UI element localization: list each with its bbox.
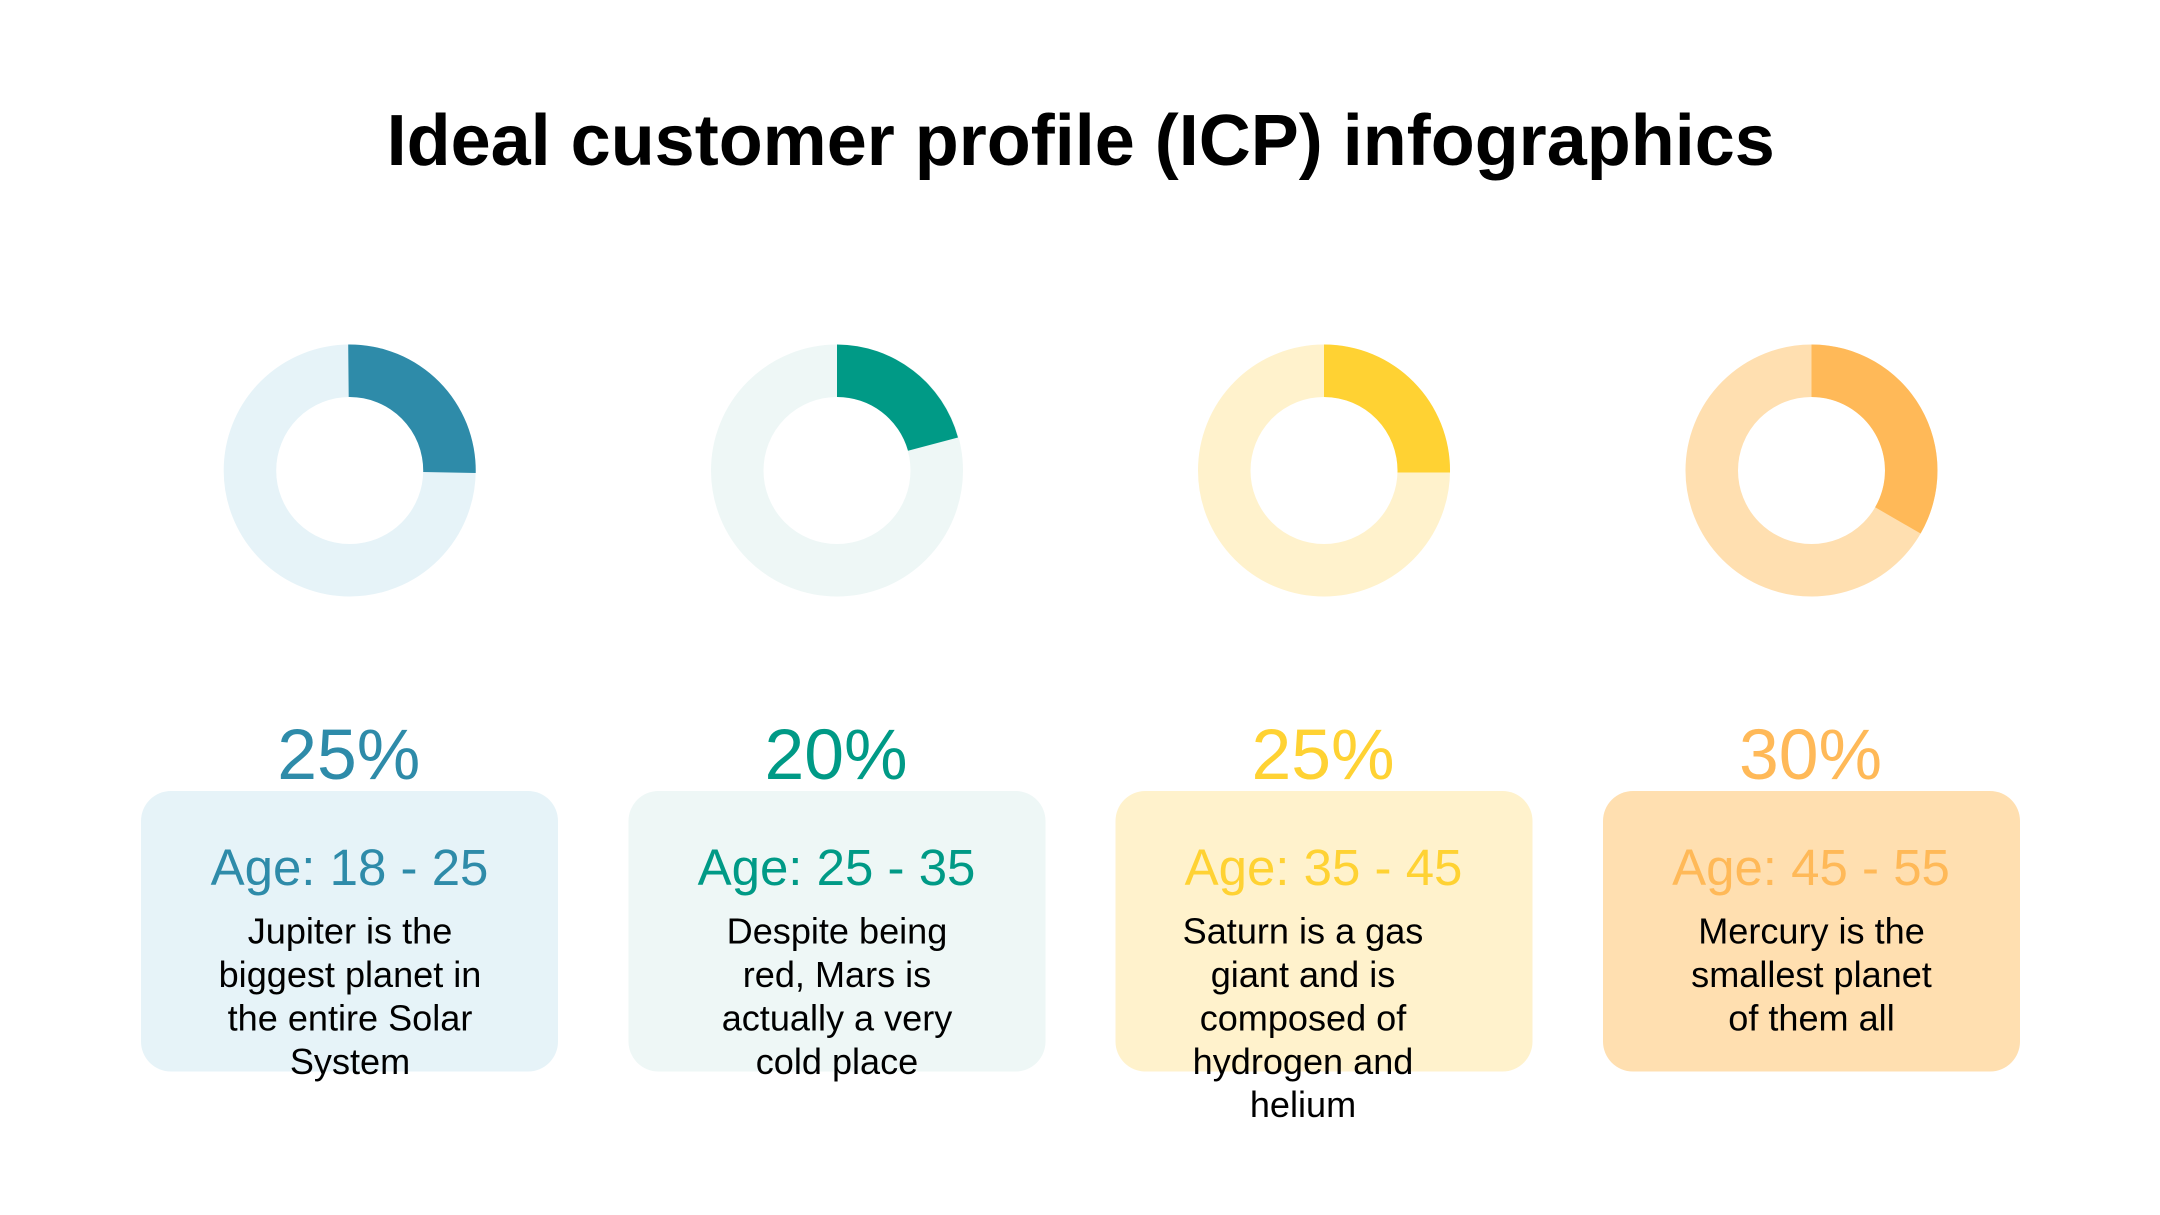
description: Saturn is a gas: [1183, 910, 1423, 952]
description: composed of: [1200, 997, 1407, 1038]
description: giant and is: [1211, 954, 1395, 995]
description: red, Mars is: [743, 954, 931, 995]
description: Despite being: [727, 910, 947, 952]
card: 25-35: [628, 791, 1046, 1082]
title: Ideal customer profile (ICP) infographics: [387, 101, 1775, 181]
description: helium: [1250, 1084, 1356, 1125]
description: cold place: [756, 1041, 918, 1082]
panel: age 18-25: [141, 344, 558, 1082]
donut chart: 25%: [1224, 344, 1450, 570]
age label: Age: 45 - 55: [1672, 839, 1950, 896]
description: hydrogen and: [1193, 1041, 1413, 1082]
donut chart: 25%: [250, 344, 476, 570]
age label: Age: 35 - 45: [1185, 839, 1462, 896]
panel: age 45-55: [1603, 344, 2020, 1072]
panel: age 25-35: [628, 344, 1046, 1082]
donut chart: 30%: [1712, 344, 1937, 570]
description: Jupiter is the: [248, 910, 452, 952]
card: 35-45: [1116, 791, 1532, 1125]
percentage: 30%: 30%: [1739, 715, 1882, 795]
description: Mercury is the: [1698, 910, 1925, 952]
age label: Age: 18 - 25: [211, 839, 488, 896]
card: 18-25: [141, 791, 558, 1082]
description: the entire Solar: [228, 997, 472, 1038]
description: biggest planet in: [219, 954, 481, 995]
card: 45-55: [1603, 791, 2020, 1072]
panel: age 35-45: [1116, 344, 1532, 1125]
percentage: 25%: 25%: [1251, 715, 1395, 795]
description: actually a very: [722, 997, 952, 1038]
age label: Age: 25 - 35: [698, 839, 975, 896]
percentage: 20%: 20%: [764, 715, 908, 795]
description: of them all: [1728, 997, 1895, 1038]
donut chart: 20%: [737, 344, 958, 570]
description: smallest planet: [1691, 954, 1932, 995]
description: System: [290, 1041, 410, 1082]
percentage: 25%: 25%: [277, 715, 420, 795]
